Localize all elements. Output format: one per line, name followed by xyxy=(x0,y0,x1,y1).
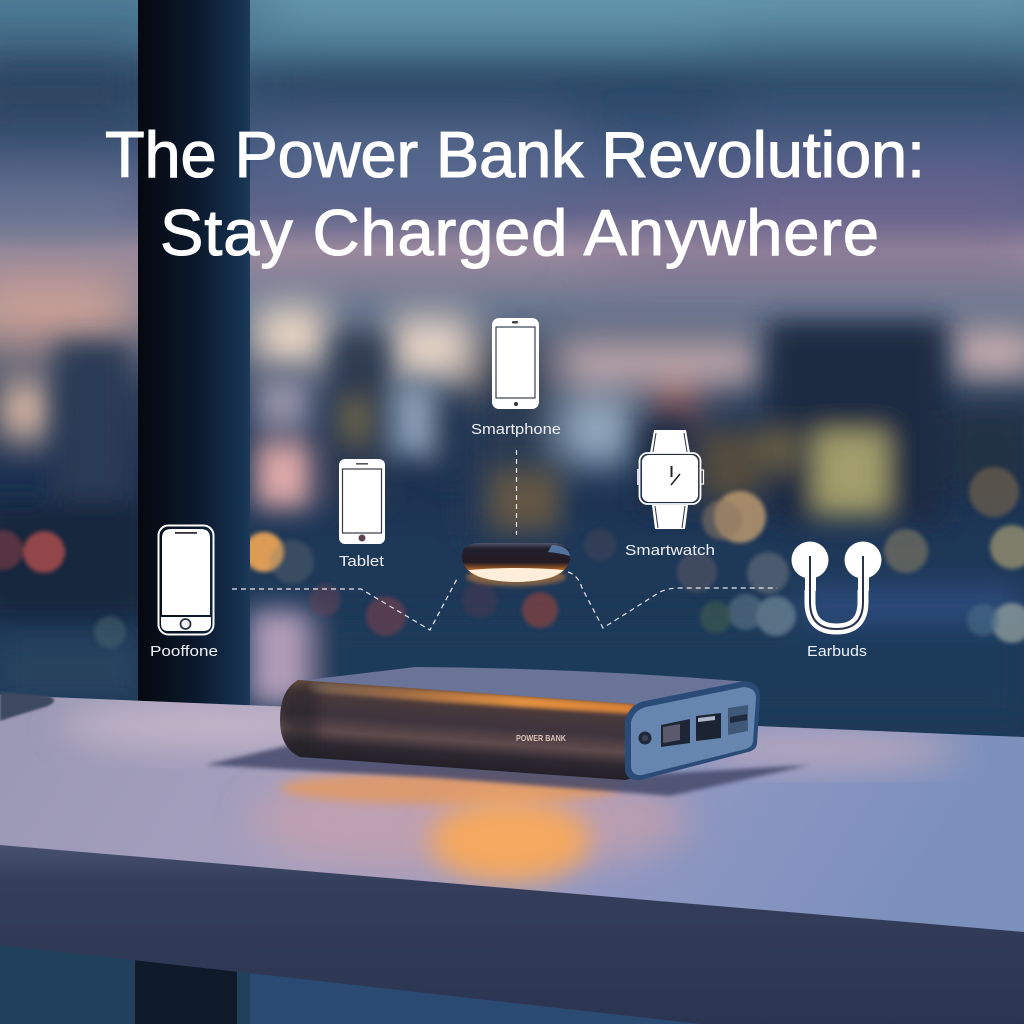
charging puck xyxy=(462,543,570,586)
table top xyxy=(0,695,1024,932)
power bank xyxy=(280,667,760,780)
power bank: usb port three xyxy=(728,705,748,735)
title: The Power Bank Revolution: xyxy=(105,118,925,191)
label: earbuds: Earbuds xyxy=(807,644,867,660)
title: Stay Charged Anywhere xyxy=(160,196,879,269)
object on table: laptop edge xyxy=(0,692,54,721)
label: tablet: Tablet xyxy=(339,554,384,570)
dashed connection lines xyxy=(232,450,777,630)
label: phone: Pooffone xyxy=(150,644,218,660)
power bank: usb port two xyxy=(696,713,721,741)
label: smartphone: Smartphone xyxy=(471,422,561,438)
icon: smartwatch xyxy=(637,430,704,529)
icon: phone xyxy=(158,526,214,634)
table underside and floor xyxy=(0,843,1024,1024)
title xyxy=(105,118,925,269)
power bank: top surface xyxy=(298,667,750,706)
power bank: orange light streak xyxy=(280,682,634,743)
power bank: round port xyxy=(638,732,652,744)
background: blurred dusk skyline xyxy=(0,0,1024,760)
power bank: usb port one xyxy=(661,719,690,747)
power bank: end panel xyxy=(625,681,760,780)
power bank: curved body xyxy=(280,680,640,780)
power bank: printed label: POWER BANK xyxy=(516,733,567,743)
icon: smartphone xyxy=(492,318,539,409)
label: smartwatch: Smartwatch xyxy=(625,543,715,559)
window column xyxy=(138,0,250,705)
icon: tablet xyxy=(339,459,385,544)
icon: earbuds xyxy=(792,542,882,629)
